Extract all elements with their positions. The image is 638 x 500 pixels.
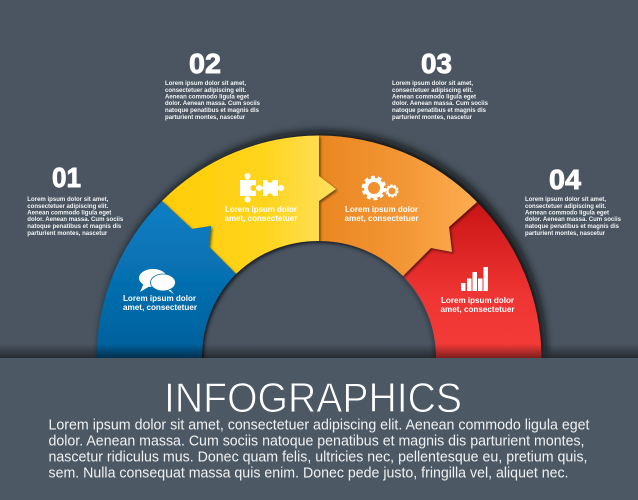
label: yellow segment: amet, consectetuer (224, 213, 298, 223)
text block 03: dolor. Aenean massa. Cum sociis (392, 100, 489, 107)
label: red segment: Lorem ipsum dolor (441, 295, 515, 305)
segment: red (403, 202, 542, 358)
text block 01 (27, 196, 124, 237)
text block 02: natoque penatibus et magnis dis (165, 107, 260, 114)
label: orange segment: Lorem ipsum dolor (345, 204, 419, 214)
label: blue segment (123, 293, 198, 312)
text block 01: dolor. Aenean massa. Cum sociis (27, 216, 124, 223)
text block 04: parturient montes, nascetur (525, 230, 606, 237)
segment: blue (96, 201, 236, 358)
segment: yellow (162, 136, 336, 274)
body paragraph (48, 418, 590, 482)
semicircular arc diagram (95, 126, 551, 358)
text block 04: consectetuer adipiscing elit. (525, 203, 606, 210)
bottom panel (0, 358, 638, 500)
callout 03 (392, 48, 489, 121)
body paragraph: sem. Nulla consequat massa quis enim. Donec pede justo, fringilla vel, aliquet nec. (48, 466, 568, 482)
segment: orange (319, 136, 477, 276)
centre hole (202, 240, 436, 476)
icon: puzzle pieces (240, 173, 284, 202)
number 04: 04 (549, 164, 581, 195)
text block 04: Lorem ipsum dolor sit amet, (525, 196, 606, 203)
callout 01 (27, 162, 124, 237)
number 03: 03 (421, 48, 452, 79)
text block 01: Lorem ipsum dolor sit amet, (27, 196, 109, 203)
text block 04: Aenean commodo ligula eget (525, 210, 609, 216)
body paragraph: nascetur ridiculus mus. Donec quam felis, ultricies nec, pellentesque eu, pretium quis, (48, 450, 588, 466)
text block 02: parturient montes, nascetur (165, 114, 246, 121)
ground shadow band (0, 344, 638, 358)
text block 01: consectetuer adipiscing elit. (27, 203, 109, 210)
callout 04 (525, 164, 622, 237)
number 01: 01 (52, 162, 81, 193)
text block 02 (165, 80, 261, 121)
label: orange segment (344, 204, 419, 223)
label: red segment (440, 295, 515, 314)
label: blue segment: amet, consectetuer (123, 302, 198, 312)
text block 03: consectetuer adipiscing elit. (392, 87, 473, 94)
label: yellow segment (224, 204, 298, 223)
text block 01: Aenean commodo ligula eget (27, 210, 111, 216)
text block 03: Lorem ipsum dolor sit amet, (392, 80, 473, 87)
callout 02 (165, 48, 261, 121)
text block 04: natoque penatibus et magnis dis (525, 223, 620, 230)
label: red segment: amet, consectetuer (440, 304, 515, 314)
text block 02: dolor. Aenean massa. Cum sociis (165, 100, 261, 107)
arc outer shadow (100, 132, 546, 354)
number 02: 02 (189, 48, 221, 79)
text block 04 (525, 196, 622, 237)
hole inner shadow (202, 241, 436, 358)
icon: bar chart (461, 267, 488, 291)
text block 02: Lorem ipsum dolor sit amet, (165, 80, 246, 87)
icon: gears (363, 177, 398, 199)
label: yellow segment: Lorem ipsum dolor (225, 204, 298, 214)
text block 03 (392, 80, 489, 121)
text block 03: natoque penatibus et magnis dis (392, 107, 487, 114)
body paragraph: dolor. Aenean massa. Cum sociis natoque penatibus et magnis dis parturient montes, (48, 434, 584, 450)
text block 02: Aenean commodo ligula eget (165, 94, 249, 100)
body paragraph: Lorem ipsum dolor sit amet, consectetuer adipiscing elit. Aenean commodo ligula eget (48, 418, 590, 434)
title: INFOGRAPHICS (164, 374, 462, 421)
text block 01: natoque penatibus et magnis dis (27, 223, 122, 230)
text block 01: parturient montes, nascetur (27, 230, 108, 237)
label: orange segment: amet, consectetuer (344, 213, 419, 223)
text block 03: parturient montes, nascetur (392, 114, 473, 121)
text block 03: Aenean commodo ligula eget (392, 94, 476, 100)
text block 04: dolor. Aenean massa. Cum sociis (525, 216, 622, 223)
label: blue segment: Lorem ipsum dolor (123, 293, 197, 303)
icon: chat bubbles (139, 269, 176, 294)
text block 02: consectetuer adipiscing elit. (165, 87, 246, 94)
